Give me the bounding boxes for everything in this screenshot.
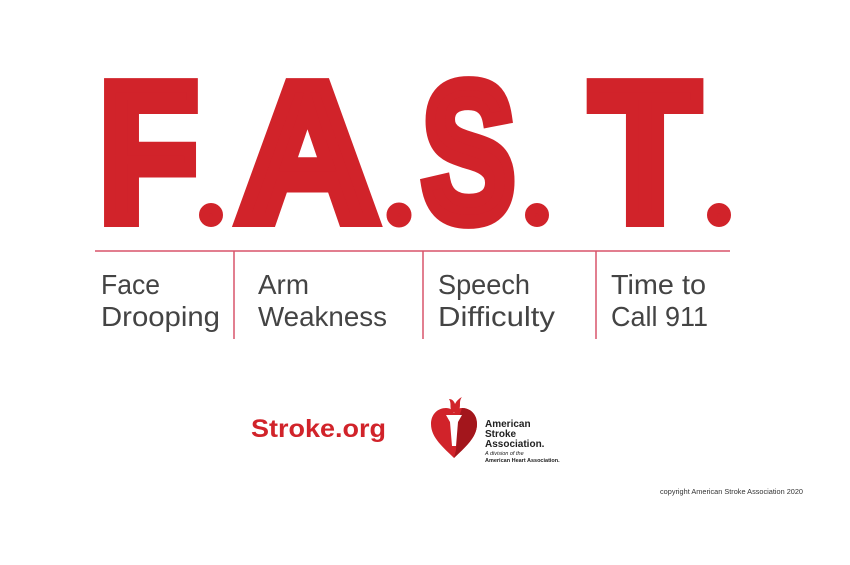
table rules — [95, 251, 730, 339]
label: arm weakness: Weakness — [258, 301, 387, 332]
copyright: copyright American Stroke Association 2020 — [660, 489, 803, 496]
title: S — [422, 43, 515, 262]
logo text: A division of the — [484, 451, 524, 457]
label: face drooping — [101, 269, 220, 332]
logo: heart torch — [431, 397, 477, 458]
stroke.org: Stroke.org — [251, 415, 386, 443]
label: time to call 911 — [611, 269, 708, 332]
logo text: American — [485, 419, 531, 430]
labels — [101, 269, 708, 332]
logo text: Stroke — [485, 429, 517, 440]
label: arm weakness: Arm — [258, 269, 309, 300]
label: arm weakness — [258, 269, 387, 332]
label: time to call 911: Call 911 — [611, 301, 708, 332]
logo text: American Heart Association. — [485, 458, 560, 464]
title: F — [99, 43, 198, 262]
title — [99, 43, 724, 262]
label: face drooping: Face — [101, 269, 160, 300]
logo text — [484, 419, 560, 464]
label: time to call 911: Time to — [611, 269, 706, 300]
label: speech difficulty: Speech — [438, 269, 530, 300]
label: speech difficulty: Difficulty — [438, 301, 555, 332]
title: T — [591, 43, 699, 262]
logo text: Association. — [485, 439, 545, 450]
label: face drooping: Drooping — [101, 301, 220, 332]
title: A — [237, 43, 378, 262]
label: speech difficulty — [438, 269, 555, 332]
